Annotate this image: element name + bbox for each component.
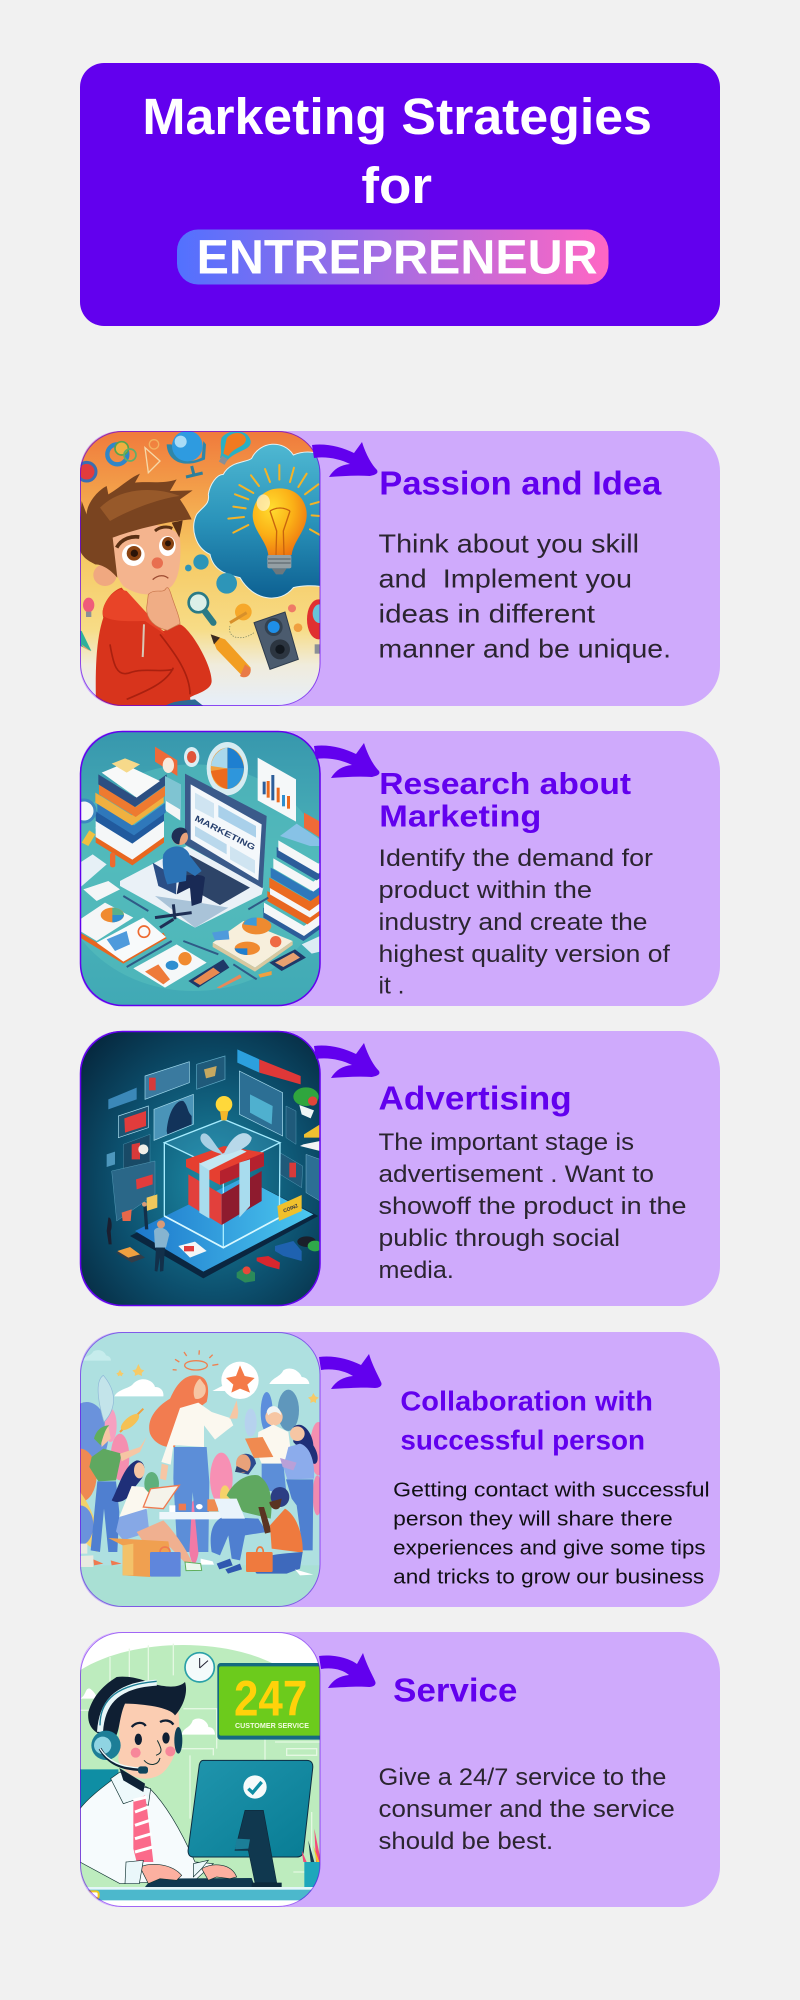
boy: hand bbox=[147, 588, 180, 630]
gift box bbox=[186, 1133, 264, 1225]
laptop base bbox=[120, 846, 263, 928]
body text: Getting contact with successful bbox=[393, 1480, 710, 1502]
body text: manner and be unique. bbox=[378, 634, 671, 664]
shirt bbox=[80, 1772, 213, 1884]
title line: Marketing Strategies: Marketing Strategies bbox=[142, 88, 652, 145]
panel: Passion and Idea bbox=[77, 431, 720, 706]
title highlight: ENTREPRENEUR: ENTREPRENEUR bbox=[197, 231, 598, 284]
man left in green bbox=[89, 1425, 147, 1565]
panel: Service bbox=[80, 1632, 720, 1907]
illustration: gift box on phone: COINZ bbox=[282, 1203, 299, 1215]
thought cloud bbox=[194, 444, 327, 598]
keyboard and hands bbox=[125, 1860, 282, 1887]
body text: industry and create the bbox=[378, 910, 648, 936]
heading: Collaboration with bbox=[400, 1386, 653, 1417]
headset bbox=[91, 1681, 157, 1774]
heading: Passion and Idea bbox=[379, 466, 662, 503]
heading bbox=[379, 766, 631, 834]
person on chair bbox=[153, 827, 205, 928]
arrow bbox=[312, 442, 377, 477]
open book with charts bbox=[80, 903, 167, 964]
heading: Research about bbox=[379, 766, 631, 801]
cloud bbox=[182, 1719, 215, 1735]
camera device bbox=[254, 612, 298, 669]
boy: hair bbox=[80, 474, 193, 578]
body text: showoff the product in the bbox=[378, 1194, 686, 1220]
illustration: boy thinking with light bulb bbox=[77, 431, 330, 706]
arrow bbox=[314, 743, 379, 778]
body text: it . bbox=[378, 974, 404, 1000]
phone platform bbox=[130, 1178, 318, 1278]
stars bbox=[116, 1364, 319, 1403]
pencil bbox=[211, 634, 251, 677]
24/7 sign: 247 bbox=[234, 1670, 307, 1726]
plant bbox=[293, 1087, 319, 1118]
illustration: customer service agent bbox=[80, 1632, 326, 1907]
orange bulb icon bbox=[230, 604, 254, 638]
red bulb right bbox=[307, 599, 320, 654]
calculators and pens bbox=[80, 854, 320, 988]
left small bulb and pencil bbox=[80, 598, 94, 652]
floating ad screens bbox=[107, 1049, 320, 1221]
panel: Collaboration with successful person bbox=[63, 1332, 720, 1607]
small blue bubbles bbox=[185, 554, 237, 594]
boy: eyes and mouth bbox=[117, 527, 176, 580]
right book stack bbox=[263, 812, 320, 941]
illustration: gift box on phone bbox=[80, 1031, 322, 1306]
star speech bubble bbox=[221, 1362, 259, 1399]
left book stack bbox=[95, 758, 167, 865]
seated man with laptop bbox=[211, 1454, 272, 1574]
head bbox=[88, 1677, 186, 1792]
body text bbox=[378, 1765, 675, 1855]
foliage bbox=[63, 1375, 327, 1564]
laptop screen: MARKETING bbox=[193, 813, 257, 852]
body text: Identify the demand for bbox=[378, 846, 653, 872]
gear left bbox=[81, 798, 96, 824]
glass cube bbox=[164, 1119, 280, 1248]
light bulb bbox=[253, 488, 307, 574]
body text: consumer and the service bbox=[378, 1797, 675, 1823]
arrow bbox=[319, 1653, 376, 1688]
body text: Give a 24/7 service to the bbox=[378, 1765, 666, 1791]
monitor bbox=[188, 1760, 313, 1883]
body text: experiences and give some tips bbox=[393, 1538, 706, 1560]
heading: Service bbox=[393, 1673, 517, 1710]
body text: advertisement . Want to bbox=[378, 1162, 654, 1188]
boy: hoodie bbox=[96, 588, 212, 706]
halo and rays bbox=[173, 1350, 218, 1370]
decorations top left bbox=[77, 440, 160, 481]
illustration: team collaboration bbox=[63, 1332, 327, 1607]
boy: face bbox=[111, 524, 180, 594]
body text: ideas in different bbox=[378, 599, 596, 629]
body text: highest quality version of bbox=[378, 942, 670, 968]
yellow card bbox=[277, 1195, 302, 1221]
body text: media. bbox=[378, 1258, 454, 1284]
arrow bbox=[314, 1043, 379, 1078]
boxes bbox=[80, 1538, 181, 1577]
panel: Advertising bbox=[80, 1031, 720, 1306]
clock bbox=[185, 1653, 214, 1682]
heading bbox=[400, 1386, 653, 1455]
woman right bbox=[280, 1425, 318, 1550]
kneeling man bbox=[246, 1487, 313, 1575]
body text bbox=[378, 529, 671, 664]
chart paper bottom bbox=[133, 944, 207, 988]
desk bbox=[80, 1887, 320, 1900]
globe bbox=[167, 431, 206, 477]
small bulb bbox=[219, 431, 251, 465]
body text bbox=[378, 1130, 686, 1284]
top icons bbox=[155, 747, 199, 821]
cream book with pie bbox=[212, 918, 293, 972]
arrow bbox=[319, 1354, 382, 1389]
24/7 sign: CUSTOMER SERVICE bbox=[235, 1721, 309, 1730]
clouds bbox=[82, 1350, 309, 1396]
seated woman bbox=[112, 1460, 202, 1571]
body text: person they will share there bbox=[393, 1509, 673, 1531]
laptop screen bbox=[185, 774, 267, 888]
body text bbox=[393, 1480, 710, 1589]
heading: Advertising bbox=[378, 1079, 572, 1116]
title panel bbox=[80, 63, 720, 326]
body text bbox=[378, 846, 670, 1000]
pencil cup bbox=[302, 1829, 320, 1887]
body text: Think about you skill bbox=[378, 529, 639, 559]
panel: Research about Marketing bbox=[60, 731, 720, 1006]
24/7 sign bbox=[217, 1663, 326, 1740]
title line: for: for bbox=[361, 157, 432, 214]
chair bbox=[80, 1769, 120, 1819]
green background bbox=[80, 1645, 320, 1889]
heading: successful person bbox=[400, 1424, 645, 1455]
woman leader bbox=[149, 1375, 238, 1565]
heading: Marketing bbox=[379, 799, 541, 834]
body text: and tricks to grow our business bbox=[393, 1567, 704, 1589]
illustration: marketing research desk bbox=[80, 731, 320, 1006]
body text: and Implement you bbox=[378, 564, 632, 594]
pie chart bbox=[207, 742, 248, 795]
back man bbox=[245, 1406, 291, 1495]
body text: should be best. bbox=[378, 1829, 553, 1855]
small items bbox=[116, 1236, 322, 1283]
magnifier bbox=[189, 593, 213, 623]
body text: product within the bbox=[378, 878, 592, 904]
bulb bbox=[216, 1096, 232, 1120]
rays bbox=[228, 465, 320, 535]
body text: public through social bbox=[378, 1226, 620, 1252]
boy: ear bbox=[93, 564, 117, 586]
body text: The important stage is bbox=[378, 1130, 634, 1156]
table bbox=[159, 1499, 222, 1519]
bar chart paper bbox=[258, 758, 296, 822]
people bbox=[107, 1202, 169, 1272]
